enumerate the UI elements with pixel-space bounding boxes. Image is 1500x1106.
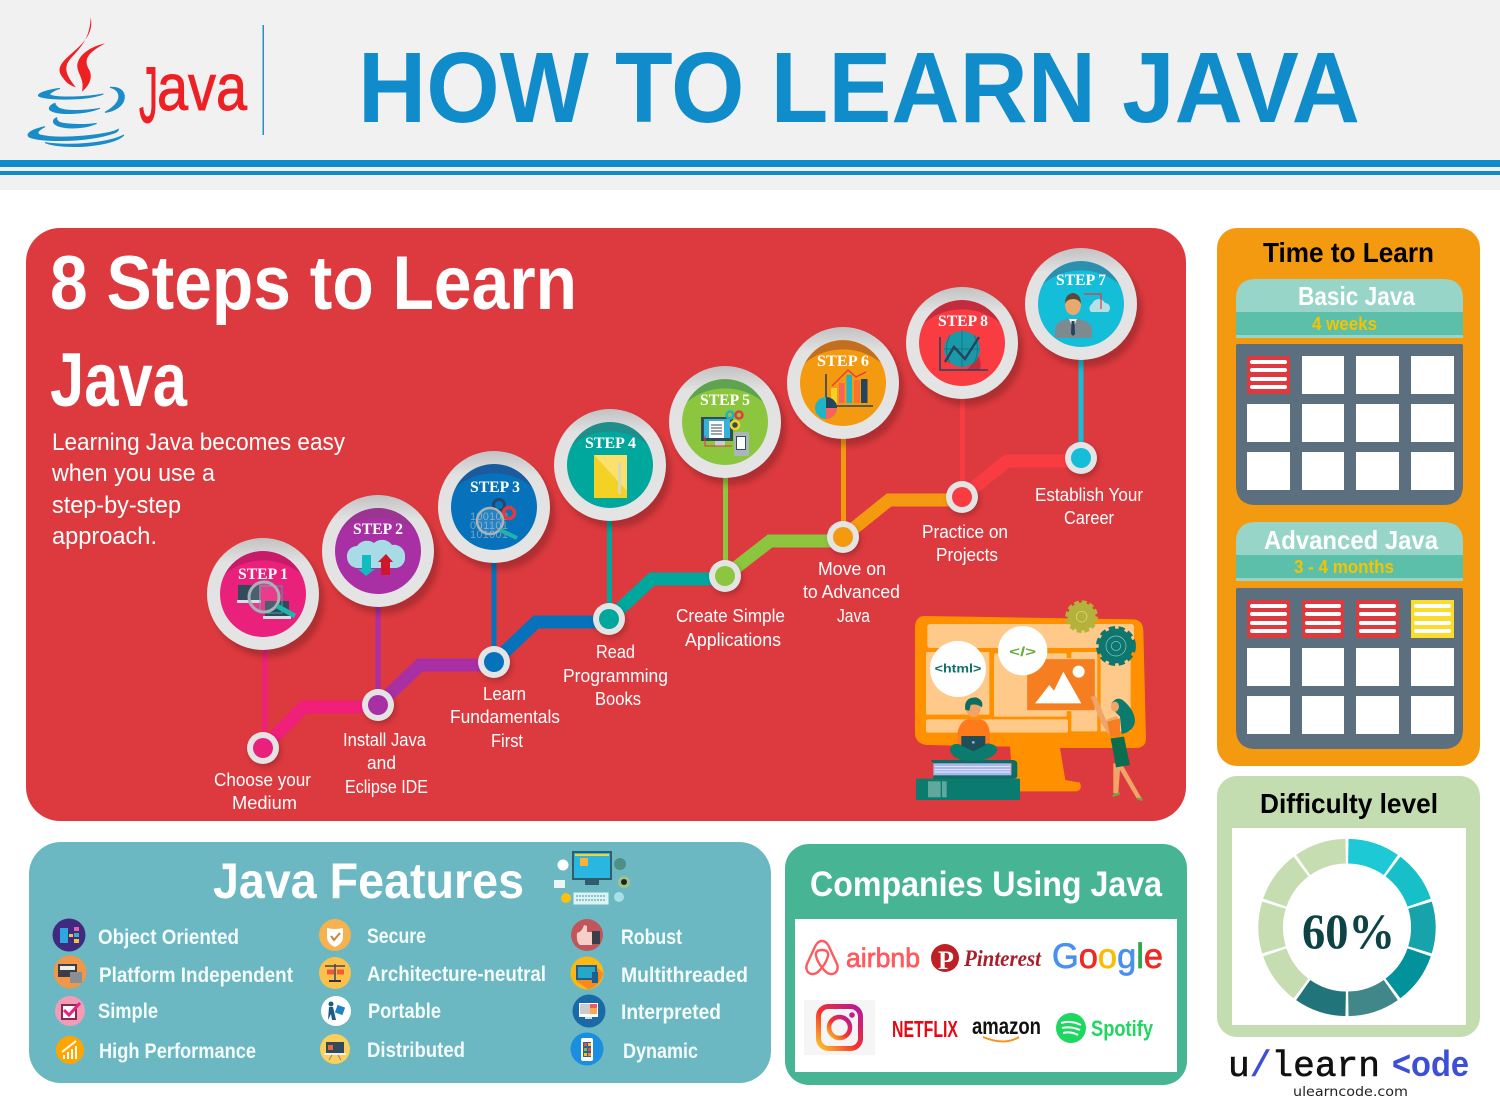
icon: cloud upload download: [347, 540, 405, 576]
logo: netflix: NETFLIX: [892, 1016, 958, 1042]
feature: object oriented: Object Oriented: [98, 926, 239, 949]
intro text: step-by-step: [52, 492, 181, 519]
label: move on to advanced java: Java: [837, 606, 871, 626]
logo: ulearncode: ulearncode.com: [1293, 1084, 1408, 1100]
step 3: [438, 451, 560, 751]
icon: java logo: ava: [157, 50, 247, 124]
label: establish your career: [1035, 485, 1143, 528]
intro text: [51, 429, 345, 550]
logo: ulearncode: u/learn: [1228, 1046, 1380, 1087]
label: practice on projects: [922, 522, 1008, 565]
icon: monitor gears phone: [701, 412, 749, 456]
step 2: STEP 2: [353, 521, 403, 538]
icon: java logo: J: [139, 50, 158, 139]
heading: 8 steps to learn java: [50, 241, 577, 423]
label: move on to advanced java: [803, 559, 900, 626]
logo: airbnb: airbnb: [846, 943, 920, 973]
feature: robust: Robust: [621, 926, 682, 949]
illustration: developers at monitor: </>: [1009, 644, 1036, 659]
label: choose your medium: [214, 770, 311, 813]
label: install java and eclipse ide: Install Java: [343, 730, 427, 750]
label: install java and eclipse ide: [343, 730, 428, 797]
step 6: [787, 327, 904, 626]
feature: architecture-neutral: Architecture-neutral: [367, 963, 546, 986]
logo: amazon: amazon: [972, 1013, 1041, 1039]
label: choose your medium: Medium: [232, 793, 297, 813]
feature: simple: Simple: [98, 1000, 158, 1023]
label: move on to advanced java: to Advanced: [803, 582, 900, 602]
intro text: approach.: [52, 523, 157, 550]
chart: 60 percent ring: [1247, 826, 1447, 1029]
feature: secure: [319, 919, 426, 951]
card: advanced java: [1236, 522, 1463, 749]
label: read programming books: Read: [596, 642, 635, 662]
label: learn fundamentals first: [450, 684, 560, 751]
feature: interpreted: Interpreted: [621, 1001, 721, 1024]
intro text: Learning Java becomes easy: [52, 429, 345, 456]
logo: spotify: [1056, 1013, 1154, 1043]
feature: high performance: [56, 1036, 256, 1064]
feature: robust: [571, 919, 682, 951]
icon: java logo: [28, 17, 247, 147]
label: create simple applications: Create Simple: [676, 606, 785, 626]
step 8 badge: STEP 8: [938, 313, 988, 330]
step 5: [669, 366, 786, 650]
intro text: when you use a: [51, 460, 216, 487]
label: practice on projects: Projects: [936, 545, 998, 565]
label: create simple applications: [676, 606, 785, 650]
icon: binary code and magnifier: 001101: [470, 520, 508, 532]
illustration: developers at monitor: [915, 603, 1146, 800]
heading: java features: Java Features: [213, 853, 524, 909]
feature: platform independent: [54, 956, 293, 988]
logo: pinterest: P: [938, 946, 954, 975]
feature: distributed: [320, 1034, 465, 1064]
label: practice on projects: Practice on: [922, 522, 1008, 542]
panel: java features: [29, 842, 771, 1083]
card: basic java: 4 weeks: [1312, 314, 1377, 334]
step 4: STEP 4: [585, 435, 636, 452]
label: learn fundamentals first: Learn: [483, 684, 526, 704]
feature: architecture-neutral: [319, 957, 546, 989]
feature: high performance: High Performance: [99, 1040, 256, 1063]
card: basic java: Basic Java: [1298, 281, 1415, 311]
step 3: STEP 3: [470, 479, 520, 496]
logo: pinterest: [931, 944, 1042, 975]
label: read programming books: [563, 642, 668, 709]
feature: interpreted: [572, 994, 721, 1028]
label: install java and eclipse ide: Eclipse IDE: [345, 777, 428, 797]
icon: globe with line chart: [940, 331, 988, 370]
calendar: 4 of 12 done: [1247, 600, 1454, 734]
card: advanced java: Advanced Java: [1264, 525, 1438, 555]
step 5: STEP 5: [700, 392, 750, 409]
step 4: [554, 409, 671, 709]
feature: dynamic: [570, 1032, 698, 1066]
heading: 8 steps to learn java: Java: [50, 338, 188, 423]
label: choose your medium: Choose your: [214, 770, 311, 790]
card: advanced java: 3 - 4 months: [1294, 557, 1394, 577]
panel: companies using java: [785, 844, 1187, 1085]
value: 60%: 60%: [1302, 903, 1395, 959]
label: establish your career: Establish Your: [1035, 485, 1143, 505]
feature: multithreaded: [570, 956, 748, 990]
label: establish your career: Career: [1064, 508, 1114, 528]
logo: airbnb: [806, 941, 920, 974]
step 6: STEP 6: [817, 353, 869, 370]
step 8 badge: [906, 287, 1023, 565]
icon: binary code and magnifier: 100100: [470, 511, 508, 523]
icon: computer and gadgets: [554, 851, 630, 905]
feature: portable: Portable: [368, 1000, 441, 1023]
feature: platform independent: Platform Independent: [99, 964, 293, 987]
label: learn fundamentals first: First: [491, 731, 523, 751]
logo: instagram: [804, 1000, 875, 1055]
step 2: [322, 495, 439, 797]
step 7 badge: STEP 7: [1056, 272, 1106, 289]
staircase connectors: [263, 461, 1081, 748]
panel: 8 steps: [26, 228, 1186, 821]
title: HOW TO LEARN JAVA: [358, 32, 1360, 144]
heading: time to learn: Time to Learn: [1263, 237, 1434, 268]
logo: ulearncode: <ode: [1392, 1043, 1469, 1084]
card: basic java: [1236, 279, 1463, 505]
header band: [0, 0, 1500, 190]
step 1: STEP 1: [238, 566, 288, 583]
feature: simple: [55, 996, 158, 1026]
calendar: 1 of 12 done: [1247, 356, 1454, 490]
label: move on to advanced java: Move on: [818, 559, 886, 579]
label: install java and eclipse ide: and: [367, 753, 396, 773]
feature: secure: Secure: [367, 925, 426, 948]
icon: yellow folder: [594, 455, 627, 498]
label: read programming books: Programming: [563, 666, 668, 686]
icon: businessman and cloud: [1055, 293, 1110, 338]
heading: difficulty level: Difficulty level: [1260, 788, 1438, 819]
label: create simple applications: Applications: [685, 630, 781, 650]
icon: binary code and magnifier: 101001: [470, 529, 508, 541]
logo: pinterest: Pinterest: [963, 946, 1042, 971]
feature: object oriented: [52, 918, 239, 952]
feature: multithreaded: Multithreaded: [621, 964, 748, 987]
icon: laptops and magnifier: [237, 582, 295, 619]
panel: difficulty level: [1217, 776, 1480, 1037]
feature: portable: [321, 996, 441, 1026]
logo: spotify: Spotify: [1091, 1016, 1154, 1041]
icon: bar chart and pie: [815, 370, 873, 419]
step 1: [207, 538, 324, 813]
feature: dynamic: Dynamic: [623, 1040, 698, 1063]
illustration: developers at monitor: <html>: [935, 662, 981, 676]
panel: time to learn: [1217, 228, 1480, 766]
icon: binary code and magnifier: [470, 500, 517, 541]
label: learn fundamentals first: Fundamentals: [450, 707, 560, 727]
feature: distributed: Distributed: [367, 1039, 465, 1062]
heading: companies using java: Companies Using Java: [810, 865, 1162, 904]
step 7 badge: [1025, 248, 1143, 528]
label: read programming books: Books: [595, 689, 641, 709]
heading: 8 steps to learn java: 8 Steps to Learn: [50, 241, 577, 326]
logo: google: Google: [1052, 937, 1163, 976]
logo: ulearncode: [1228, 1043, 1469, 1100]
